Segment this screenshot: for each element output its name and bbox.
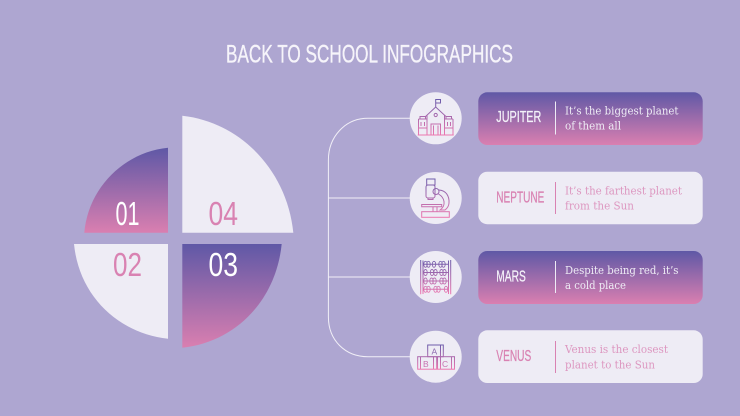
segment 04	[182, 116, 293, 233]
card: Neptune	[478, 172, 703, 224]
connector lines	[328, 118, 410, 357]
icon: alphabet blocks	[410, 331, 462, 383]
card: Venus: Venus is the closest	[564, 343, 668, 356]
card: Neptune: from the Sun	[565, 200, 634, 212]
card: Venus: VENUS	[496, 348, 531, 365]
card: Neptune: It’s the farthest planet	[565, 184, 682, 198]
pie chart	[74, 116, 293, 348]
segment 03: 03	[208, 246, 238, 283]
card: Mars: a cold place	[565, 279, 626, 292]
segment 02: 02	[113, 246, 142, 283]
card: Venus	[478, 330, 703, 383]
icon: alphabet blocks: B	[423, 359, 429, 369]
icon: school	[410, 92, 462, 144]
card: Venus: planet to the Sun	[565, 358, 655, 372]
icon: abacus	[410, 251, 462, 303]
segment 01	[84, 148, 168, 233]
segment 02	[74, 244, 168, 339]
title: BACK TO SCHOOL INFOGRAPHICS	[226, 40, 513, 68]
segment 03	[182, 244, 282, 348]
card: Mars	[478, 251, 703, 304]
card: Mars: Despite being red, it’s	[565, 264, 679, 277]
card: Jupiter: of them all	[565, 120, 621, 132]
icon: alphabet blocks: C	[442, 359, 448, 369]
card: Jupiter: JUPITER	[496, 109, 541, 126]
icon: alphabet blocks: A	[432, 346, 438, 356]
card: Mars: MARS	[496, 268, 526, 286]
segment 04: 04	[208, 195, 238, 232]
segment 01: 01	[116, 195, 140, 232]
card: Jupiter	[478, 92, 703, 145]
card: Jupiter: It’s the biggest planet	[565, 104, 679, 118]
icon: microscope	[410, 172, 462, 224]
card: Neptune: NEPTUNE	[496, 190, 544, 206]
